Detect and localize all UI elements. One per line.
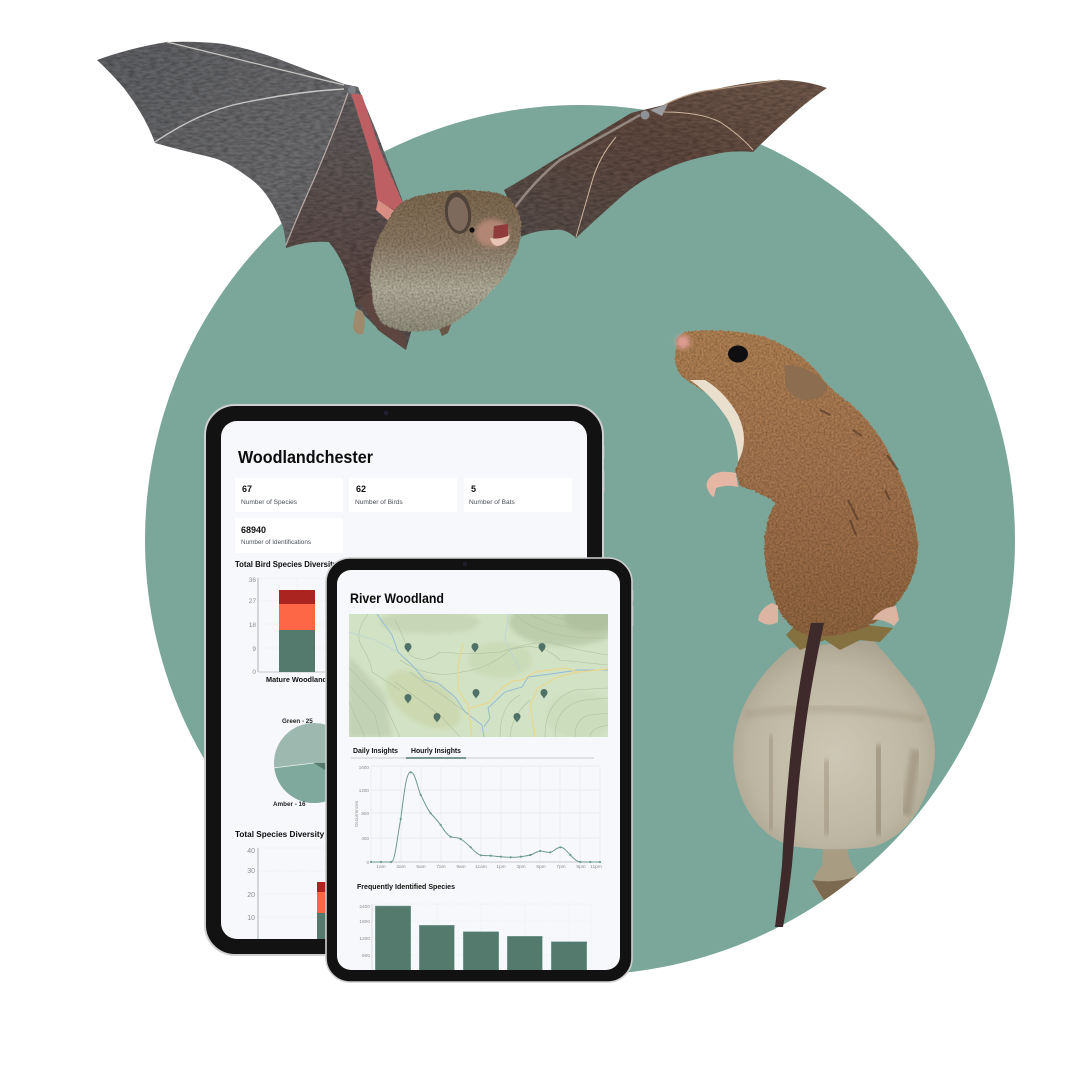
stat card: birds xyxy=(356,486,402,504)
stacked bar chart: bird diversity: 36 xyxy=(249,577,256,584)
stat card: identifications xyxy=(241,526,311,544)
line chart: hourly occurrences: 1am xyxy=(376,864,386,870)
line chart: hourly occurrences: Occurrences xyxy=(354,800,359,827)
stat card: species: Number of Species xyxy=(241,499,298,506)
bat left wing xyxy=(97,42,420,350)
mouse nose xyxy=(676,335,690,349)
mouse tail xyxy=(775,623,824,927)
pie chart: conservation status: Amber - 16 xyxy=(273,801,306,808)
stacked bar chart: total diversity: 40 xyxy=(247,848,255,855)
stacked bar chart: bird diversity: 27 xyxy=(249,598,256,605)
tabs: Daily Insights xyxy=(353,746,398,755)
line chart: hourly occurrences xyxy=(354,765,602,870)
tabs: Hourly Insights xyxy=(411,746,461,755)
small tablet xyxy=(326,558,634,982)
stacked bar chart: total diversity: 30 xyxy=(247,868,255,875)
line chart: hourly occurrences: 3pm xyxy=(516,864,526,870)
bat ear xyxy=(442,190,474,236)
bat right wing xyxy=(504,80,827,238)
large tablet xyxy=(205,404,604,955)
line chart: hourly occurrences: 9pm xyxy=(576,864,586,870)
tablet buttons xyxy=(631,590,634,626)
bar chart: frequently identified species xyxy=(359,904,591,972)
pie chart: conservation status xyxy=(273,718,326,806)
bat body xyxy=(370,190,521,332)
line chart: hourly occurrences: 800 xyxy=(361,811,369,816)
heading: bird diversity: Total Bird Species Diversity xyxy=(235,559,337,569)
line chart: hourly occurrences: 1pm xyxy=(496,864,506,870)
camera xyxy=(384,410,388,416)
bar chart: frequently identified species: 600 xyxy=(362,953,370,959)
topographic map xyxy=(349,614,608,737)
dashboard title: River Woodland xyxy=(350,591,444,606)
mouse front paw xyxy=(707,472,738,497)
background circle xyxy=(145,105,1015,975)
heading: total diversity: Total Species Diversity c xyxy=(235,829,331,839)
stat card: species xyxy=(242,486,297,506)
stacked bar chart: bird diversity xyxy=(249,577,330,684)
stacked bar chart: bird diversity: 9 xyxy=(252,646,256,653)
line chart: hourly occurrences: 11pm xyxy=(590,864,602,870)
stat card: bats xyxy=(470,486,514,504)
poppy seed head xyxy=(733,620,935,849)
line chart: hourly occurrences: 7pm xyxy=(556,864,566,870)
tablet screen xyxy=(337,570,621,972)
tablet buttons xyxy=(545,404,604,492)
map pins xyxy=(404,643,548,722)
stat card: species: 67 xyxy=(242,484,252,494)
illustration: harvest mouse on poppy seed head xyxy=(675,330,935,927)
mouse throat xyxy=(690,380,744,462)
line chart: hourly occurrences: 5pm xyxy=(536,864,546,870)
line chart: hourly occurrences: 1200 xyxy=(359,788,369,793)
mouse body xyxy=(675,330,918,636)
mouse hind feet xyxy=(758,603,899,626)
bar chart: frequently identified species: 1800 xyxy=(359,919,370,925)
mouse fur streaks xyxy=(820,410,898,535)
dashboard title: Woodlandchester xyxy=(238,447,373,467)
mouse eye xyxy=(728,346,748,362)
line chart: hourly occurrences: 0 xyxy=(366,860,369,865)
stat card: birds: 62 xyxy=(356,484,366,494)
tabs xyxy=(351,746,594,758)
stat card: identifications: Number of Identifications xyxy=(241,539,312,546)
line chart: hourly occurrences: 7am xyxy=(436,864,446,870)
pie chart: conservation status: Green - 25 xyxy=(282,718,313,725)
stat card: birds: Number of Birds xyxy=(355,499,403,506)
stacked bar chart: total diversity: 20 xyxy=(247,892,255,899)
line chart: hourly occurrences: 9am xyxy=(456,864,466,870)
stacked bar chart: bird diversity: Mature Woodland xyxy=(266,675,327,684)
stat card: identifications: 68940 xyxy=(241,525,266,535)
stat card: bats: Number of Bats xyxy=(469,499,516,506)
line chart: hourly occurrences: 400 xyxy=(361,836,369,841)
tablet frame xyxy=(326,558,632,982)
bar chart: frequently identified species: 2400 xyxy=(359,904,370,910)
stacked bar chart: bird diversity: 18 xyxy=(249,622,256,629)
stacked bar chart: total diversity xyxy=(247,848,330,940)
stacked bar chart: total diversity: 10 xyxy=(247,915,255,922)
camera xyxy=(463,562,467,566)
line chart: hourly occurrences: 5am xyxy=(416,864,426,870)
line chart: hourly occurrences: 3am xyxy=(396,864,406,870)
line chart: hourly occurrences: 11am xyxy=(475,864,487,870)
stacked bar chart: bird diversity: 0 xyxy=(252,669,256,676)
illustration: bat xyxy=(97,42,827,350)
bat face xyxy=(469,219,510,247)
heading: frequently identified species: Frequently Identified Species xyxy=(357,882,455,891)
tablet screen xyxy=(221,421,587,940)
bat tail membrane and foot xyxy=(353,290,452,350)
line chart: hourly occurrences: 1600 xyxy=(359,765,369,770)
mouse ear xyxy=(785,365,827,400)
tablet frame xyxy=(205,405,603,955)
stat card: bats: 5 xyxy=(471,484,476,494)
poppy stem xyxy=(812,848,858,902)
bar chart: frequently identified species: 1200 xyxy=(359,936,370,942)
